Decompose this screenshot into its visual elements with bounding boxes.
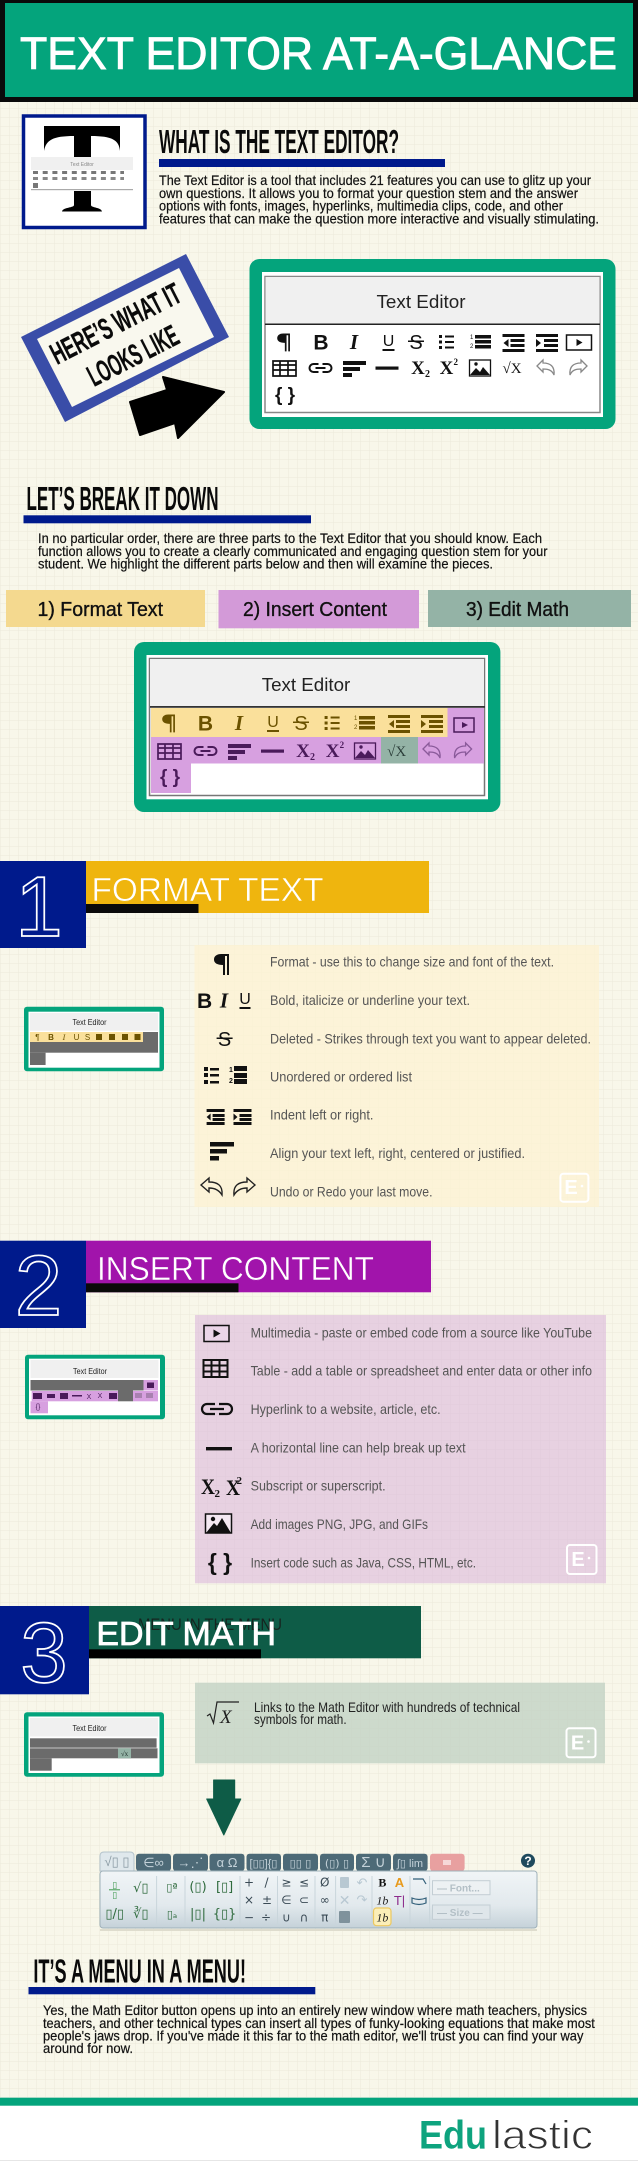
- font and size dropdowns: [432, 1881, 490, 1919]
- math symbols: ▯: [112, 1891, 117, 1901]
- icon: subscript superscript: 2: [214, 1488, 220, 1500]
- section header: 3 edit math: [0, 1606, 421, 1701]
- text: horizontal line: A horizontal line can help break up text: [251, 1439, 466, 1455]
- icon: square root: [207, 1702, 239, 1728]
- text: math editor link: symbols for math.: [254, 1711, 347, 1727]
- title banner: [0, 0, 638, 102]
- panel: colour-coded text editor: Text Editor: [262, 675, 350, 695]
- icons: toolbar: X: [411, 358, 425, 379]
- icons: toolbar: 2: [425, 369, 430, 380]
- button: format text: 1) Format Text: [38, 599, 163, 621]
- icons: format group: I: [234, 711, 244, 735]
- icons: toolbar: 2: [470, 344, 474, 350]
- text: deleted: Deleted - Strikes through text you want to appear deleted.: [270, 1030, 591, 1046]
- panel: math editor toolbar screenshot: ×: [244, 1893, 254, 1907]
- tabs: ∫▯ lim: [396, 1858, 423, 1870]
- icon: subscript superscript: [201, 1474, 242, 1500]
- panel: math editor toolbar screenshot: ✕: [339, 1893, 350, 1909]
- icon: paragraph: [214, 954, 229, 975]
- panel: math editor toolbar screenshot: ∈: [281, 1893, 292, 1907]
- footer: edulastic logo: lastic: [492, 2113, 593, 2157]
- panel: colour-coded text editor: [134, 642, 500, 812]
- section header: 2 insert content: 2: [15, 1239, 62, 1334]
- text block: intro paragraph: The Text Editor is a tool that includes 21 features you can use to glitz up your: [159, 172, 591, 188]
- icons: insert group: X: [296, 741, 310, 762]
- button: edit math: 3) Edit Math: [466, 599, 569, 621]
- icon: link: [202, 1404, 232, 1414]
- mini editor: format text highlighted: U: [74, 1033, 80, 1042]
- text block: menu paragraph: Yes, the Math Editor button opens up into an entirely new window where math teachers, physics: [43, 2002, 587, 2018]
- icon: bold italic underline: [197, 988, 251, 1013]
- tabs: [100, 1852, 465, 1871]
- text block: menu paragraph: people's jaws drop. If you've made it this far to the math editor, we'll trust you can find your way: [43, 2028, 583, 2044]
- section header: 3 edit math: 3: [20, 1606, 68, 1701]
- icon: logo mark: E: [571, 1549, 585, 1571]
- icon: image: [206, 1514, 232, 1533]
- icon: square root: X: [219, 1707, 233, 1728]
- mini editor: insert content highlighted: [25, 1355, 165, 1419]
- icon: lists: [204, 1066, 247, 1085]
- text: format: Format - use this to change size and font of the text.: [270, 954, 554, 970]
- panel: math editor toolbar screenshot: ∪: [282, 1910, 291, 1924]
- panel: math editor toolbar screenshot: ≤: [299, 1876, 309, 1890]
- icons: format group: [162, 711, 443, 736]
- panel: format text features: [194, 945, 599, 1207]
- icon: table: [204, 1360, 228, 1377]
- callout: here's what it looks like: LOOKS LIKE: [82, 319, 184, 393]
- text: subscript: Subscript or superscript.: [251, 1478, 386, 1494]
- mini editor: insert content highlighted: X: [87, 1394, 92, 1401]
- text: hyperlink: Hyperlink to a website, article, etc.: [251, 1401, 441, 1417]
- icon: strikethrough: S: [218, 1029, 231, 1051]
- icon: code braces: { }: [208, 1549, 232, 1575]
- icons: toolbar: I: [349, 330, 359, 354]
- math symbols: (▯): [189, 1880, 207, 1895]
- icons: toolbar: U: [383, 333, 394, 350]
- help icon: ?: [524, 1854, 532, 1868]
- math symbols: ▯: [112, 1881, 117, 1891]
- button: edit math: [428, 590, 631, 627]
- text block: intro paragraph: options with fonts, images, hyperlinks, multimedia clips, code, and other: [159, 198, 563, 214]
- icons: toolbar: { }: [275, 385, 296, 406]
- mini editor: format text highlighted: ¶: [35, 1033, 40, 1042]
- section header: 1 format text: FORMAT TEXT: [92, 871, 324, 908]
- text: math editor link: Links to the Math Editor with hundreds of technical: [254, 1699, 520, 1715]
- text: images: Add images PNG, JPG, and GIFs: [251, 1516, 428, 1532]
- math symbols: √▯: [133, 1881, 149, 1896]
- icons: toolbar: [273, 330, 592, 406]
- icon: bold italic underline: U: [239, 991, 251, 1008]
- callout: here's what it looks like: [21, 254, 229, 422]
- mini editor: format text highlighted: S: [85, 1033, 90, 1042]
- callout: here's what it looks like: HERE’S WHAT IT: [45, 277, 187, 371]
- panel: text editor screenshot: Text Editor: [376, 292, 466, 312]
- section header: 3 edit math: EDIT MATH: [96, 1615, 276, 1652]
- heading: menu in a menu: IT’S A MENU IN A MENU!: [33, 1952, 246, 1989]
- text block: break it down paragraph: function allows you to create a clearly communicated and engaging question stem for your: [38, 543, 548, 559]
- mini editor: format text highlighted: Text Editor: [72, 1018, 107, 1027]
- text block: menu paragraph: around for now.: [43, 2040, 133, 2056]
- button: format text: [6, 590, 205, 627]
- title banner: TEXT EDITOR AT-A-GLANCE: [20, 28, 617, 79]
- icons: toolbar: B: [313, 332, 329, 354]
- text block: menu paragraph: [43, 2002, 595, 2056]
- panel: edit math features: [195, 1683, 605, 1763]
- panel: math editor toolbar screenshot: ±: [262, 1893, 272, 1907]
- tabs: [▯▯]{▯: [250, 1858, 277, 1870]
- footer: edulastic logo: [0, 2098, 638, 2169]
- icons: format group: 2: [354, 725, 358, 731]
- icons: toolbar: X: [440, 358, 454, 379]
- icon: indent: [207, 1109, 252, 1125]
- section header: 1 format text: [0, 860, 429, 955]
- icon: lists: 2: [229, 1078, 233, 1085]
- mini editor: format text highlighted: I: [62, 1033, 66, 1042]
- icons: format group: U: [267, 714, 279, 731]
- panel: math editor toolbar screenshot: −: [244, 1910, 254, 1924]
- arrow: black pointing to editor: [130, 377, 224, 438]
- math symbols: ▯ₐ: [167, 1908, 177, 1921]
- mini editor: insert content highlighted: {}: [36, 1404, 41, 1411]
- text: table: Table - add a table or spreadsheet and enter data or other info: [251, 1363, 592, 1379]
- math symbols: |▯|: [190, 1907, 206, 1922]
- text: align: Align your text left, right, centered or justified.: [270, 1145, 525, 1161]
- icon: logo mark: E: [571, 1732, 584, 1754]
- icons: insert group: X: [326, 741, 340, 762]
- panel: text editor screenshot: [250, 259, 616, 429]
- text: bold: Bold, italicize or underline your text.: [270, 992, 470, 1008]
- mini editor: edit math highlighted: √x: [121, 1750, 129, 1758]
- icon: logo mark: [566, 1728, 596, 1757]
- icons: format group: S: [294, 713, 308, 735]
- text: lists: Unordered or ordered list: [270, 1068, 412, 1084]
- icons: toolbar: S: [409, 332, 423, 354]
- math symbols: ∛▯: [133, 1906, 149, 1922]
- text block: break it down paragraph: In no particular order, there are three parts to the Text Editor that you should know. Each: [38, 530, 542, 546]
- mini editor: edit math highlighted: [24, 1712, 164, 1777]
- panel: math editor toolbar screenshot: Ø: [320, 1876, 329, 1890]
- math symbols: [▯]: [216, 1880, 233, 1895]
- text block: break it down paragraph: student. We highlight the different parts below and then will examine the pieces.: [38, 556, 493, 572]
- mini editor: insert content highlighted: Text Editor: [73, 1367, 107, 1376]
- text: code: Insert code such as Java, CSS, HTML, etc.: [251, 1554, 476, 1570]
- panel: math editor toolbar screenshot: T|: [394, 1893, 405, 1908]
- text: multimedia: Multimedia - paste or embed code from a source like YouTube: [251, 1324, 592, 1340]
- panel: math editor toolbar screenshot: A: [395, 1875, 405, 1890]
- math symbols: [105, 1880, 236, 1922]
- panel: math editor toolbar screenshot: ∞: [320, 1893, 330, 1907]
- button: insert content: 2) Insert Content: [243, 599, 387, 621]
- panel: math editor toolbar screenshot: +: [244, 1876, 254, 1890]
- icon: subscript superscript: X: [226, 1475, 240, 1500]
- panel: math editor toolbar screenshot: ⊂: [299, 1893, 309, 1907]
- math symbols: ▯/▯: [105, 1907, 124, 1922]
- panel: math editor toolbar screenshot: ↶: [357, 1876, 368, 1891]
- text block: menu paragraph: teachers, and other technical types can insert all types of funky-looking equations that make most: [43, 2015, 595, 2031]
- section header: 2 insert content: [0, 1239, 431, 1334]
- mini editor: insert content highlighted: X: [98, 1393, 103, 1400]
- heading: let's break it down: LET’S BREAK IT DOWN: [26, 480, 218, 517]
- heading: what is the text editor: WHAT IS THE TEXT EDITOR?: [159, 123, 399, 160]
- section: it's a menu in a menu: [28, 1952, 595, 2056]
- footer: edulastic logo: Edu: [419, 2113, 487, 2157]
- tabs: α Ω: [217, 1855, 238, 1870]
- help icon: [521, 1854, 535, 1868]
- icon: align: [210, 1142, 234, 1160]
- panel: math editor toolbar screenshot: 1b: [376, 1910, 388, 1924]
- icon: logo mark: [560, 1174, 588, 1202]
- icon: undo redo: [201, 1178, 255, 1195]
- section header: 1 format text: 1: [15, 860, 63, 955]
- panel: math editor toolbar screenshot: ≥: [281, 1876, 291, 1890]
- icons: format group: B: [198, 712, 213, 736]
- panel: math editor toolbar screenshot: ↷: [357, 1893, 369, 1908]
- icons: insert group: [158, 718, 474, 788]
- section header: 2 insert content: INSERT CONTENT: [97, 1250, 374, 1287]
- icon: big T with mini editor: [24, 116, 145, 228]
- text block: intro paragraph: features that can make the question more interactive and visually stimulating.: [159, 210, 599, 226]
- tabs: ▯▯ ▯: [290, 1857, 311, 1870]
- panel: math editor toolbar screenshot: ∩: [300, 1910, 308, 1924]
- tabs: ∈∞: [143, 1855, 164, 1870]
- text: undo: Undo or Redo your last move.: [270, 1183, 432, 1199]
- icons: toolbar: √X: [502, 361, 522, 377]
- separators: [157, 1876, 430, 1924]
- panel: math editor toolbar screenshot: B: [378, 1876, 386, 1890]
- panel: insert content features: [195, 1315, 606, 1583]
- icon: bold italic underline: I: [219, 988, 229, 1012]
- tabs: Σ ∪: [361, 1854, 386, 1871]
- icon: big T with mini editor: Text Editor: [70, 162, 94, 168]
- mini editor: format text highlighted: B: [48, 1033, 54, 1042]
- icons: insert group: √X: [387, 744, 406, 760]
- tabs: →⋰: [178, 1855, 204, 1870]
- icon: logo mark: E: [564, 1177, 578, 1199]
- section header: 3 edit math: MENU IN THE MENU: [138, 1615, 282, 1634]
- font and size dropdowns: — Font...: [437, 1884, 480, 1894]
- text block: intro paragraph: own questions. It allows you to format your question stem and the answer: [159, 185, 578, 201]
- text: math editor link: [254, 1699, 520, 1727]
- icons: insert group: 2: [310, 752, 315, 763]
- text: indent: Indent left or right.: [270, 1107, 374, 1123]
- icon: horizontal line: [206, 1447, 232, 1450]
- section: what is the text editor: [159, 123, 599, 226]
- text block: break it down paragraph: [38, 530, 548, 572]
- icon: bold italic underline: B: [197, 990, 212, 1013]
- icons: toolbar: 2: [454, 357, 458, 367]
- math symbols: {▯}: [213, 1907, 236, 1922]
- panel: math editor toolbar screenshot: 1b: [376, 1894, 388, 1908]
- tabs: √▯ ▯: [104, 1854, 130, 1869]
- button: insert content: [218, 590, 419, 628]
- icons: insert group: 2: [340, 740, 345, 750]
- arrow: down to math editor: [207, 1780, 241, 1835]
- font and size dropdowns: — Size —: [437, 1908, 483, 1919]
- icons: insert group: { }: [160, 767, 181, 788]
- panel: math editor toolbar screenshot: /: [264, 1876, 269, 1890]
- icons: format group: 1: [354, 716, 358, 722]
- section: let's break it down: [24, 480, 548, 572]
- icons: toolbar: 1: [470, 335, 474, 341]
- icon: multimedia: [204, 1326, 229, 1342]
- icon: logo mark: [567, 1545, 596, 1574]
- text block: intro paragraph: [159, 172, 599, 226]
- panel: math editor toolbar screenshot: ÷: [261, 1910, 271, 1924]
- icon: subscript superscript: X: [201, 1474, 215, 1499]
- tabs: (▯) ▯: [325, 1857, 349, 1870]
- icon: subscript superscript: 2: [236, 1475, 242, 1487]
- panel: math editor toolbar screenshot: [100, 1852, 537, 1931]
- panel: math editor toolbar screenshot: π: [321, 1910, 328, 1924]
- mini editor: format text highlighted: [24, 1007, 164, 1071]
- icon: lists: 1: [229, 1067, 233, 1074]
- math symbols: ▯ª: [166, 1881, 178, 1894]
- mini editor: edit math highlighted: Text Editor: [72, 1724, 107, 1733]
